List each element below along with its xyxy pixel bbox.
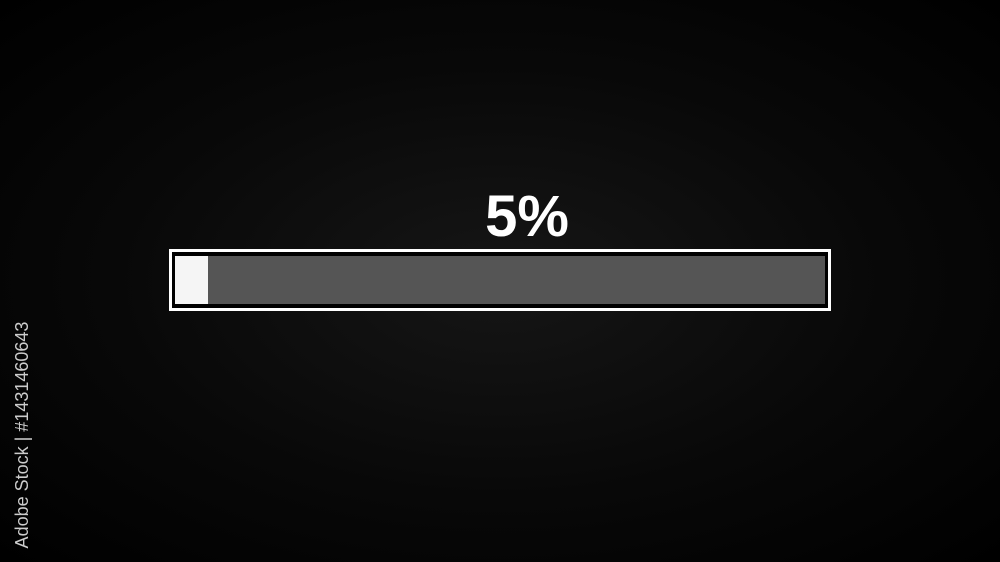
bar track	[175, 256, 825, 304]
percentage label: 5%	[485, 184, 569, 249]
progress bar	[169, 249, 831, 311]
stock id text: Adobe Stock | #1431460643	[12, 322, 32, 548]
bar fill	[175, 256, 208, 304]
